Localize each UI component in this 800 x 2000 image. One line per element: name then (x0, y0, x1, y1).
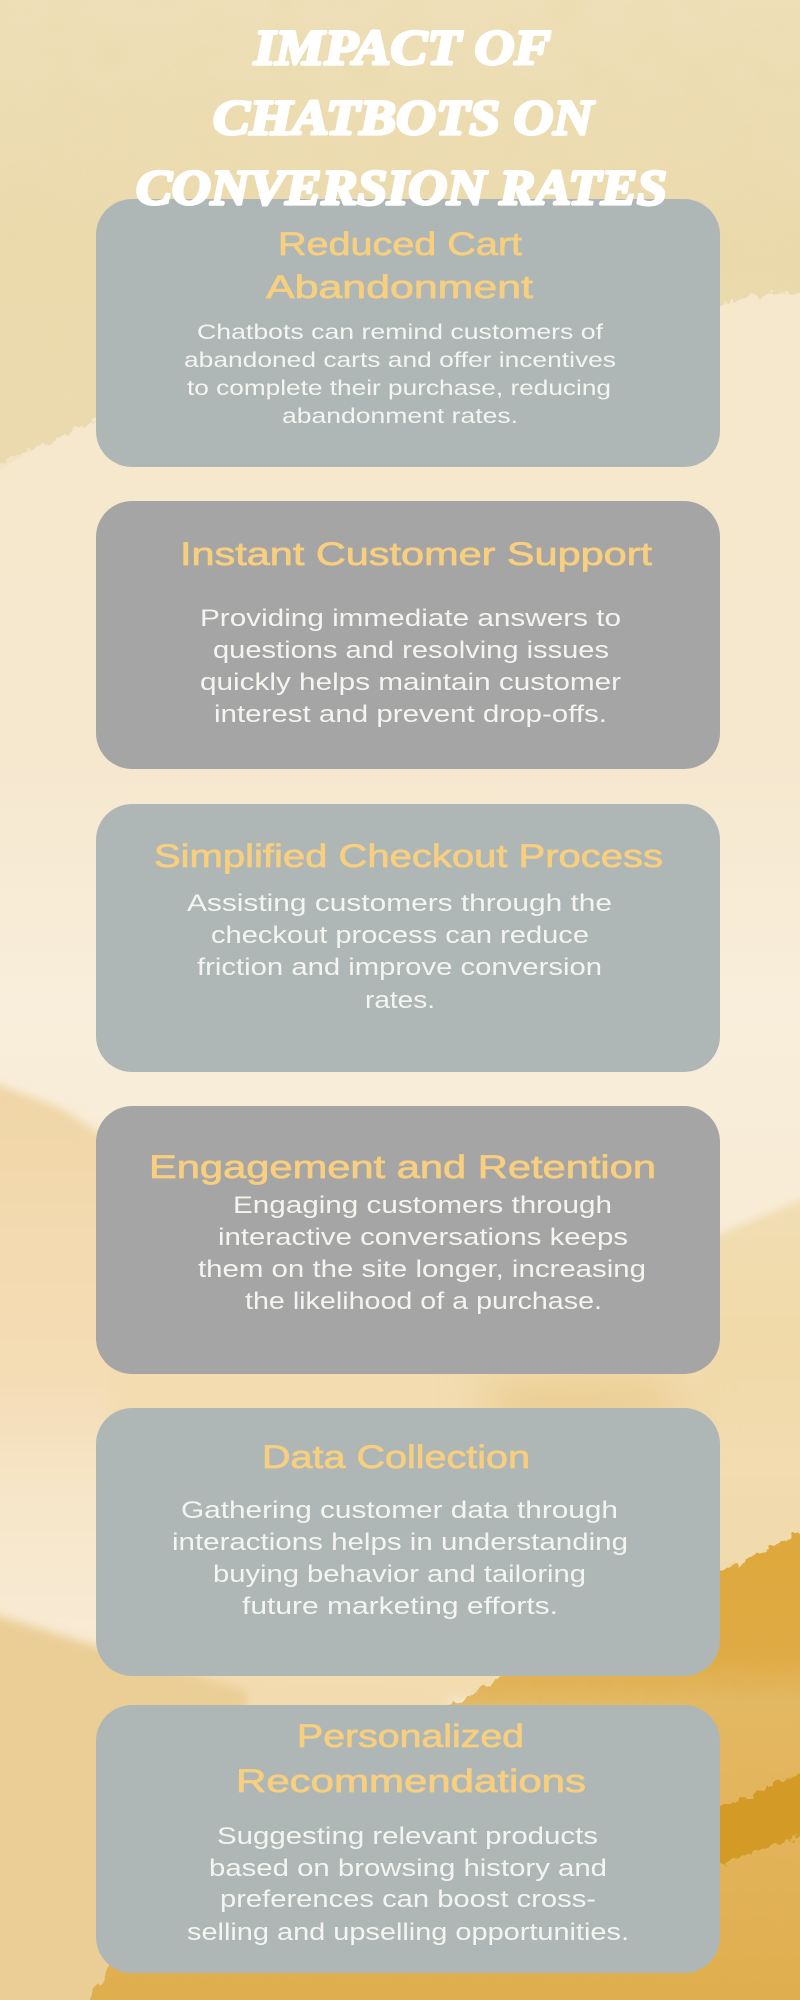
text: reduced cart abandonment description: abandoned carts and offer incentives (184, 349, 616, 372)
text: personalized recommendations description: preferences can boost cross- (220, 1886, 596, 1913)
text: instant customer support description: quickly helps maintain customer (200, 669, 621, 696)
text: reduced cart abandonment description (184, 321, 616, 428)
text: data collection description: buying behavior and tailoring (213, 1561, 586, 1588)
text: personalized recommendations description: based on browsing history and (209, 1855, 607, 1882)
text: data collection description: interactions helps in understanding (172, 1529, 628, 1556)
text: simplified checkout process description: rates. (365, 987, 435, 1014)
panel: simplified checkout process (96, 804, 720, 1072)
text: instant customer support description: questions and resolving issues (213, 637, 609, 664)
heading: reduced cart abandonment: Reduced Cart (278, 226, 522, 262)
panel: personalized recommendations (96, 1705, 720, 1973)
heading: instant customer support: Instant Customer Support (180, 536, 652, 572)
text: engagement and retention description: Engaging customers through (233, 1192, 612, 1219)
text: engagement and retention description: the likelihood of a purchase. (245, 1288, 602, 1315)
text: data collection description (172, 1497, 628, 1620)
text: simplified checkout process description: Assisting customers through the (187, 890, 612, 917)
text: reduced cart abandonment description: to complete their purchase, reducing (187, 377, 611, 400)
panel: data collection (96, 1408, 720, 1676)
text: data collection description: Gathering customer data through (181, 1497, 618, 1524)
title: CHATBOTS ON (213, 89, 595, 145)
text: personalized recommendations description: Suggesting relevant products (217, 1823, 598, 1850)
panel: engagement and retention (96, 1106, 720, 1374)
heading: simplified checkout process: Simplified Checkout Process (154, 838, 663, 874)
text: instant customer support description (200, 605, 621, 728)
text: engagement and retention description (198, 1192, 646, 1315)
panel: reduced cart abandonment (96, 199, 720, 467)
title: CONVERSION RATES (136, 159, 667, 215)
heading: reduced cart abandonment: Abandonment (266, 269, 533, 305)
heading: personalized recommendations: Personalized (297, 1718, 524, 1754)
heading: engagement and retention: Engagement and Retention (149, 1149, 656, 1185)
text: simplified checkout process description (187, 890, 612, 1014)
text: simplified checkout process description: checkout process can reduce (211, 922, 589, 949)
text: engagement and retention description: them on the site longer, increasing (198, 1256, 646, 1283)
panel: instant customer support (96, 501, 720, 769)
text: data collection description: future marketing efforts. (242, 1593, 558, 1620)
heading: data collection: Data Collection (262, 1439, 530, 1475)
text: personalized recommendations description (187, 1823, 629, 1946)
text: reduced cart abandonment description: Chatbots can remind customers of (197, 321, 603, 344)
heading: personalized recommendations: Recommendations (236, 1763, 586, 1799)
text: simplified checkout process description: friction and improve conversion (197, 954, 602, 981)
text: engagement and retention description: interactive conversations keeps (218, 1224, 628, 1251)
heading: reduced cart abandonment (266, 226, 533, 305)
text: instant customer support description: Providing immediate answers to (200, 605, 621, 632)
title (136, 19, 667, 215)
title: IMPACT OF (253, 19, 551, 75)
text: personalized recommendations description: selling and upselling opportunities. (187, 1919, 629, 1946)
text: reduced cart abandonment description: abandonment rates. (282, 405, 518, 428)
heading: personalized recommendations (236, 1718, 586, 1799)
text: instant customer support description: interest and prevent drop-offs. (214, 701, 607, 728)
